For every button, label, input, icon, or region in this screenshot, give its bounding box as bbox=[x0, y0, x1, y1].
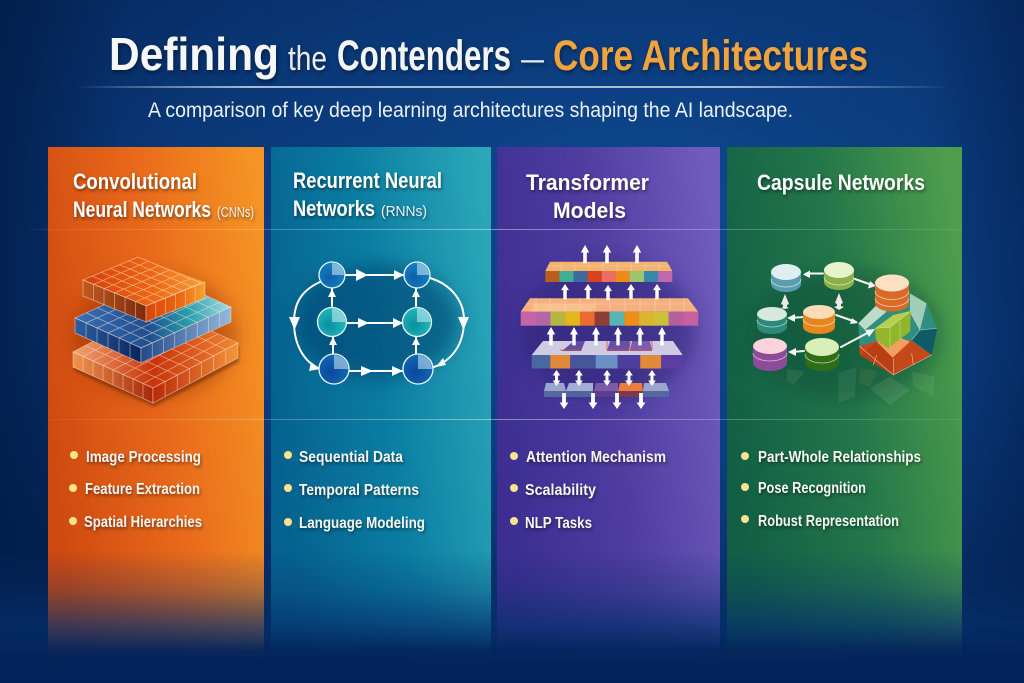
bullet list: Transformer: Attention Mechanism bbox=[526, 449, 666, 466]
panel heading: Transformer bbox=[526, 170, 649, 223]
title: Defining bbox=[109, 28, 279, 80]
icon: transformer layer stack bbox=[520, 245, 698, 409]
bullet list: Transformer: Scalability bbox=[525, 482, 596, 499]
bullet list: Transformer: NLP Tasks bbox=[525, 515, 592, 532]
polyhedron bbox=[858, 293, 937, 375]
bullet list: CNNs: Spatial Hierarchies bbox=[84, 514, 202, 531]
bullet list: RNNs: Temporal Patterns bbox=[299, 482, 419, 499]
layer 2 bbox=[521, 298, 698, 326]
section divider: under icons bbox=[48, 419, 962, 420]
panel heading: CNNs: Neural Networks bbox=[73, 197, 211, 222]
capsule c4 bbox=[757, 307, 787, 334]
bullet list: RNNs: Language Modeling bbox=[299, 515, 425, 532]
connections bbox=[289, 269, 469, 376]
panel heading: Transformer: Models bbox=[553, 198, 626, 223]
panel heading: Transformer: Transformer bbox=[526, 170, 649, 195]
icon: capsule network bbox=[750, 262, 940, 405]
bullet list: CNNs: Image Processing bbox=[86, 449, 201, 466]
title: the bbox=[288, 40, 327, 78]
title rule bbox=[75, 86, 950, 88]
nodes bbox=[318, 262, 433, 384]
panel: Transformer bbox=[497, 147, 720, 657]
capsule c3 bbox=[875, 274, 909, 312]
bullet list: RNNs bbox=[284, 449, 425, 532]
capsule c6 bbox=[753, 338, 787, 371]
panel heading: CNNs: (CNNs) bbox=[217, 204, 254, 221]
panel heading: CNNs: Convolutional bbox=[73, 169, 197, 194]
bullet list: Transformer bbox=[510, 449, 666, 532]
panel: RNNs bbox=[271, 147, 491, 657]
section divider: under headings bbox=[30, 229, 962, 230]
panel: CNNs bbox=[48, 147, 264, 657]
panel heading: RNNs: Networks bbox=[293, 196, 375, 221]
layer 1 bbox=[545, 262, 672, 282]
attention arrows bbox=[547, 245, 666, 409]
bullet list: CNNs bbox=[69, 449, 202, 531]
panel heading: Capsule: Capsule Networks bbox=[757, 170, 925, 195]
capsule c7 bbox=[805, 338, 839, 371]
panel heading: CNNs bbox=[73, 169, 254, 222]
layer 3 bbox=[532, 341, 683, 368]
bullet list: Capsule: Pose Recognition bbox=[758, 480, 866, 497]
title: Core Architectures bbox=[553, 32, 868, 80]
layer 4 bbox=[544, 383, 669, 397]
capsule arrows bbox=[781, 270, 876, 356]
icon: recurrent node network bbox=[289, 262, 469, 384]
bullet list: Capsule: Robust Representation bbox=[758, 513, 899, 530]
title: Contenders bbox=[337, 32, 511, 80]
panel: Capsule Networks bbox=[727, 147, 962, 657]
bullet list: RNNs: Sequential Data bbox=[299, 449, 403, 466]
panel heading: RNNs: Recurrent Neural bbox=[293, 168, 442, 193]
subtitle: A comparison of key deep learning architectures shaping the AI landscape. bbox=[148, 99, 793, 122]
bottom fade bbox=[0, 550, 1024, 683]
capsule c5 bbox=[803, 305, 835, 334]
title bbox=[109, 28, 868, 80]
bullet list: Capsule bbox=[741, 449, 921, 530]
capsule c2 bbox=[824, 262, 854, 290]
title: – bbox=[521, 40, 544, 78]
reflection bbox=[787, 367, 935, 405]
bullet list: CNNs: Feature Extraction bbox=[85, 481, 200, 498]
bullet list: Capsule: Part-Whole Relationships bbox=[758, 449, 921, 466]
icon: stacked feature map layers bbox=[73, 257, 239, 407]
panel heading: RNNs: (RNNs) bbox=[381, 203, 427, 220]
panel heading: RNNs bbox=[293, 168, 442, 221]
capsule c1 bbox=[771, 264, 801, 292]
